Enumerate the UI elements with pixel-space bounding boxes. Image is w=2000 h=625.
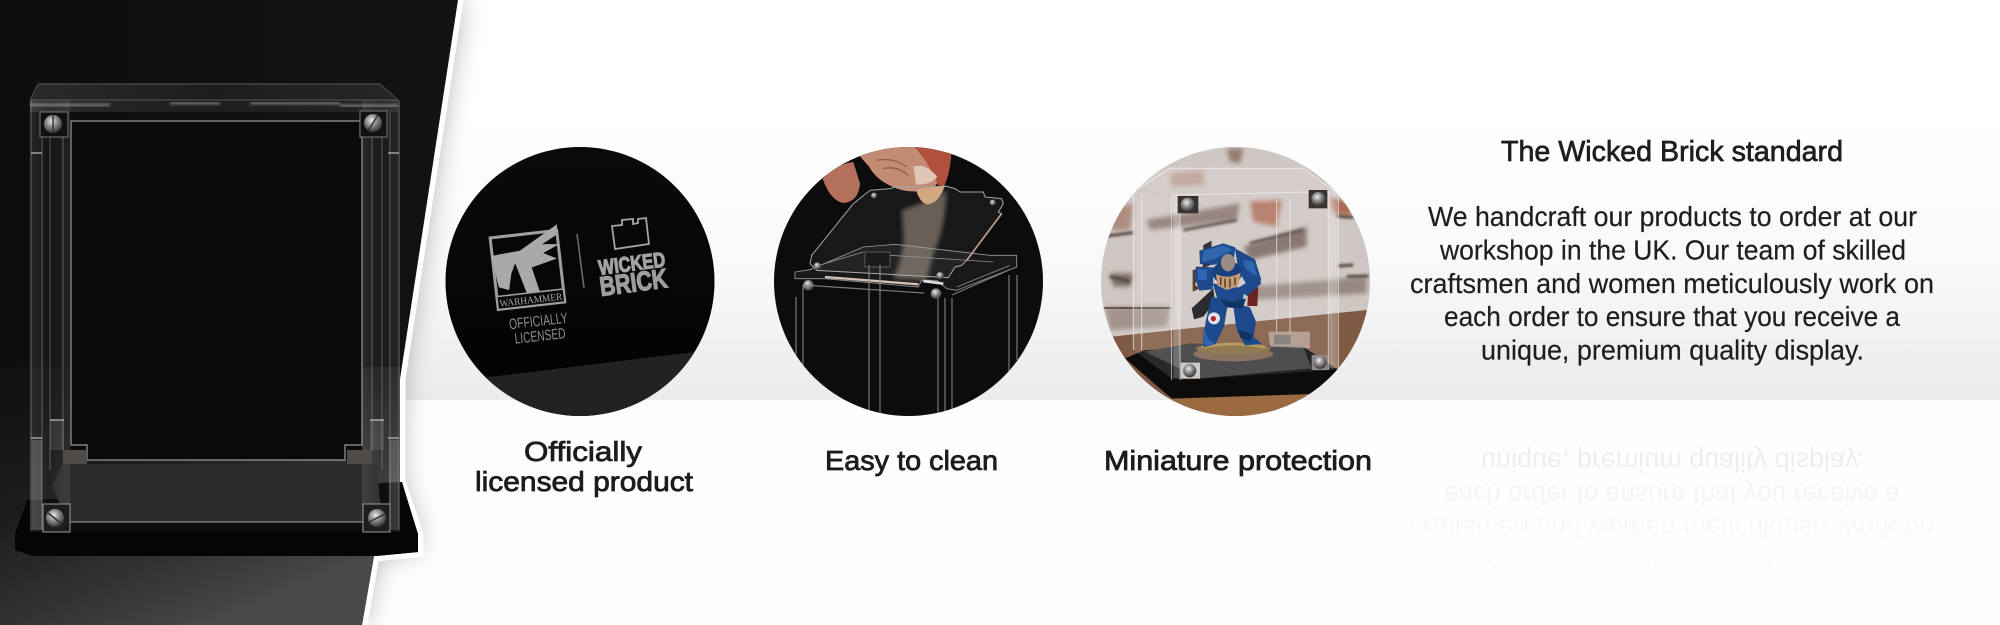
black plinth base (15, 482, 418, 556)
logo: Warhammer: WARHAMMER (499, 292, 563, 310)
metal lower back brackets (63, 450, 87, 464)
text reflection: mirrored description: We handcraft our products to order at our (1428, 580, 1917, 611)
logo: WICKED BRICK wordmark: BRICK (598, 263, 670, 302)
logo divider (577, 234, 584, 288)
case screws and brackets (1178, 190, 1328, 379)
product: acrylic display case (15, 84, 418, 556)
logo: WICKED BRICK wordmark: WICKED (597, 248, 667, 280)
text block: company description: each order to ensure that you receive a (1444, 301, 1901, 332)
drop shadow beside diagonal edge (0, 0, 462, 625)
acrylic pillars (30, 100, 70, 532)
brick wall backdrop (1097, 143, 1377, 343)
text reflection: mirrored description: unique, premium quality display. (1481, 446, 1864, 478)
text block: company description: unique, premium quality display. (1481, 334, 1864, 366)
miniature base (1193, 343, 1273, 361)
corner bracket top left (40, 112, 68, 137)
logo: Warhammer: LICENSED (514, 325, 567, 348)
acrylic top plate (30, 84, 398, 112)
text block: company description: workshop in the UK. Our team of skilled (1439, 234, 1906, 266)
panel: dark product photo (0, 0, 458, 625)
miniature gun (1192, 288, 1215, 319)
logo: brick icon (612, 218, 649, 249)
miniature: blue space marine (1192, 241, 1273, 361)
text reflection: mirrored description (1410, 446, 1934, 611)
miniature armour (1195, 243, 1262, 347)
case acrylic walls (1133, 167, 1338, 380)
case rim (795, 244, 1017, 290)
heading: The Wicked Brick standard: The Wicked Brick standard (1501, 136, 1843, 168)
case pillars and lower panel (796, 265, 1017, 417)
screws on rim (803, 193, 996, 299)
text block: company description: craftsmen and women meticulously work on (1410, 268, 1934, 299)
screw top left (44, 115, 62, 133)
text block: company description: We handcraft our products to order at our (1428, 201, 1917, 232)
logo: WICKED BRICK wordmark (597, 252, 670, 296)
grey case floor (1145, 343, 1312, 378)
label: easy to clean: Easy to clean (825, 445, 998, 476)
inner panel outline (71, 121, 362, 460)
text reflection: mirrored description: workshop in the UK. Our team of skilled (1439, 546, 1906, 578)
screw top right (364, 114, 382, 132)
grey floor of case (52, 464, 390, 522)
reflected fingers in lid (893, 190, 947, 280)
screw bottom left (46, 509, 64, 527)
text reflection: mirrored description: craftsmen and women meticulously work on (1410, 513, 1934, 544)
logo: Warhammer: OFFICIALLY (508, 310, 569, 333)
hand: fingers and thumb (823, 144, 952, 204)
label: miniature protection: Miniature protection (1104, 445, 1372, 476)
miniature knee emblem (1208, 312, 1220, 324)
logo: Warhammer (488, 224, 570, 349)
text reflection: mirrored description: each order to ensure that you receive a (1444, 480, 1901, 511)
miniature head and chest (1212, 262, 1242, 282)
screw bottom right (368, 509, 386, 527)
corner bracket top right (360, 111, 387, 137)
circle photo: officially licensed logos (440, 147, 720, 420)
acrylic lid (810, 186, 1003, 278)
corner bracket bottom right (363, 504, 390, 532)
circle photo: miniature in case (1097, 143, 1377, 420)
grey surface in photo (486, 352, 694, 416)
text block: company description (1410, 201, 1934, 366)
label: officially licensed product: licensed product (475, 466, 693, 497)
circle photo: lifting acrylic lid (770, 144, 1050, 417)
label: officially licensed product: Officially (524, 436, 642, 467)
corner bracket bottom left (43, 504, 70, 532)
wooden table (1112, 310, 1367, 416)
case interior back (71, 121, 362, 460)
label: officially licensed product (475, 436, 693, 497)
black plinth base (1125, 347, 1338, 399)
